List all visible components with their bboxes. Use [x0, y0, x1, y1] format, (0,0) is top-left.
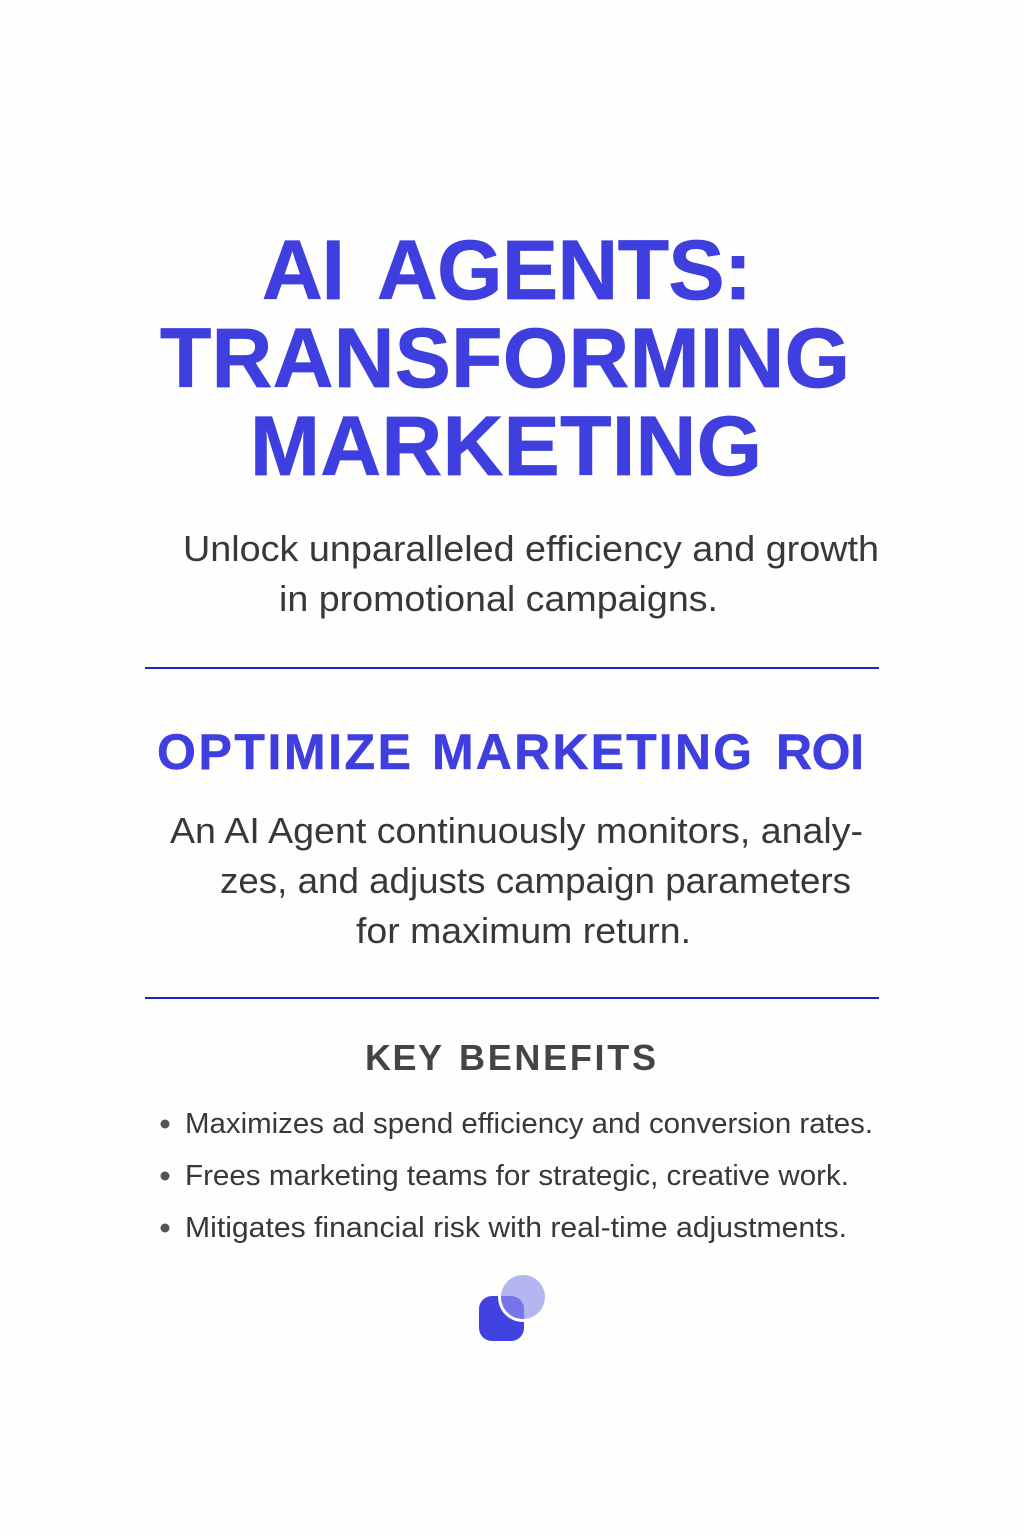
heading: key benefits: [365, 1037, 656, 1078]
icon: overlapping square and circle logo: [479, 1272, 548, 1341]
benefit 2: Frees marketing teams for strategic, creative work.: [185, 1160, 849, 1192]
subtitle: [183, 528, 879, 619]
heading: key benefits: BENEFITS: [459, 1037, 656, 1078]
title: [160, 223, 850, 493]
subtitle: Unlock unparalleled efficiency and growth: [183, 528, 879, 569]
heading: optimize marketing roi: OPTIMIZE: [157, 724, 411, 780]
heading: optimize marketing roi: MARKETING: [432, 724, 752, 780]
title: AI: [262, 223, 345, 317]
heading: optimize marketing roi: ROI: [776, 724, 864, 780]
description paragraph: zes, and adjusts campaign parameters: [220, 860, 851, 901]
benefit 1: Maximizes ad spend efficiency and conversion rates.: [185, 1108, 873, 1140]
title: TRANSFORMING: [160, 311, 850, 405]
heading: optimize marketing roi: [157, 724, 864, 780]
heading: key benefits: KEY: [365, 1037, 442, 1078]
description paragraph: [170, 810, 863, 951]
title: MARKETING: [250, 399, 762, 493]
benefit 3: Mitigates financial risk with real-time adjustments.: [185, 1212, 847, 1244]
description paragraph: for maximum return.: [356, 910, 691, 951]
description paragraph: An AI Agent continuously monitors, analy-: [170, 810, 863, 851]
title: AGENTS:: [377, 223, 752, 317]
benefits list: [160, 1108, 873, 1244]
subtitle: in promotional campaigns.: [279, 578, 718, 619]
